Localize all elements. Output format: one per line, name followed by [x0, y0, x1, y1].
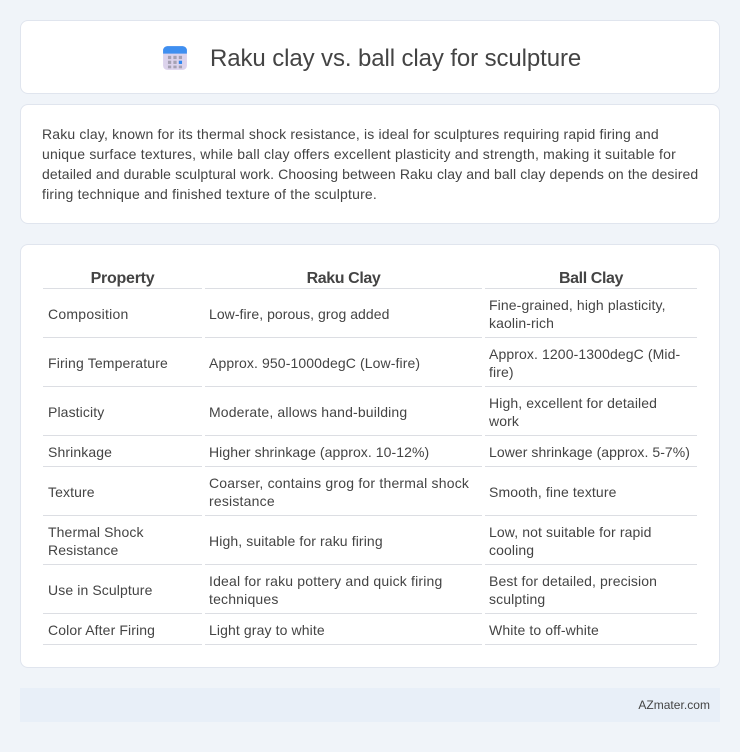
row: texture: Coarser, contains grog for thermal shock — [209, 475, 469, 491]
row: thermal shock resistance — [43, 524, 697, 565]
row: plasticity: High, excellent for detailed — [489, 395, 657, 411]
icon: calendar — [163, 46, 187, 70]
row: thermal shock resistance: Low, not suitable for rapid — [489, 524, 652, 540]
row: use in sculpture: techniques — [209, 591, 279, 607]
row: composition: Composition — [48, 306, 129, 322]
row: thermal shock resistance: Thermal Shock — [48, 524, 144, 540]
footer credit: AZmater.com — [638, 698, 710, 712]
row: shrinkage: Lower shrinkage (approx. 5-7%) — [489, 444, 690, 460]
summary text — [42, 126, 698, 202]
row: firing temperature: Firing Temperature — [48, 355, 168, 371]
table header: Raku Clay — [307, 270, 380, 287]
row: color after firing: Light gray to white — [209, 622, 325, 638]
row: composition — [43, 297, 697, 338]
row: texture — [43, 475, 697, 516]
row: firing temperature: Approx. 950-1000degC (Low-fire) — [209, 355, 420, 371]
row: composition: kaolin-rich — [489, 315, 554, 331]
row: composition: Low-fire, porous, grog added — [209, 306, 389, 322]
row: use in sculpture — [43, 573, 697, 614]
row: texture: resistance — [209, 493, 275, 509]
row: color after firing: White to off-white — [489, 622, 599, 638]
summary text: Raku clay, known for its thermal shock resistance, is ideal for sculptures requiring rapid firing and — [42, 126, 659, 142]
row: color after firing — [43, 622, 697, 645]
row: firing temperature: fire) — [489, 364, 514, 380]
row: plasticity: work — [489, 413, 519, 429]
row: use in sculpture: Use in Sculpture — [48, 582, 152, 598]
row: firing temperature: Approx. 1200-1300degC (Mid- — [489, 346, 680, 362]
table header — [43, 270, 697, 289]
row: use in sculpture: sculpting — [489, 591, 545, 607]
table header: Ball Clay — [559, 270, 623, 287]
row: texture: Smooth, fine texture — [489, 484, 616, 500]
summary panel — [20, 104, 720, 224]
row: shrinkage: Higher shrinkage (approx. 10-12%) — [209, 444, 429, 460]
row: thermal shock resistance: Resistance — [48, 542, 118, 558]
row: composition: Fine-grained, high plasticity, — [489, 297, 666, 313]
row: thermal shock resistance: cooling — [489, 542, 534, 558]
title: Raku clay vs. ball clay for sculpture — [210, 45, 581, 72]
table header: Property — [91, 270, 154, 287]
row: plasticity: Plasticity — [48, 404, 104, 420]
row: color after firing: Color After Firing — [48, 622, 155, 638]
row: firing temperature — [43, 346, 697, 387]
summary text: unique surface textures, while ball clay offers excellent plasticity and strength, making it suitable for — [42, 146, 676, 162]
row: thermal shock resistance: High, suitable for raku firing — [209, 533, 383, 549]
footer bar — [20, 688, 720, 722]
header panel — [20, 20, 720, 94]
row: shrinkage: Shrinkage — [48, 444, 112, 460]
row: plasticity: Moderate, allows hand-building — [209, 404, 407, 420]
summary text: detailed and durable sculptural work. Choosing between Raku clay and ball clay depends on the desired — [42, 166, 698, 182]
row: use in sculpture: Ideal for raku pottery and quick firing — [209, 573, 442, 589]
summary text: firing technique and finished texture of the sculpture. — [42, 186, 377, 202]
comparison table panel — [20, 244, 720, 668]
row: shrinkage — [43, 444, 697, 467]
row: use in sculpture: Best for detailed, precision — [489, 573, 657, 589]
row: plasticity — [43, 395, 697, 436]
row: texture: Texture — [48, 484, 95, 500]
